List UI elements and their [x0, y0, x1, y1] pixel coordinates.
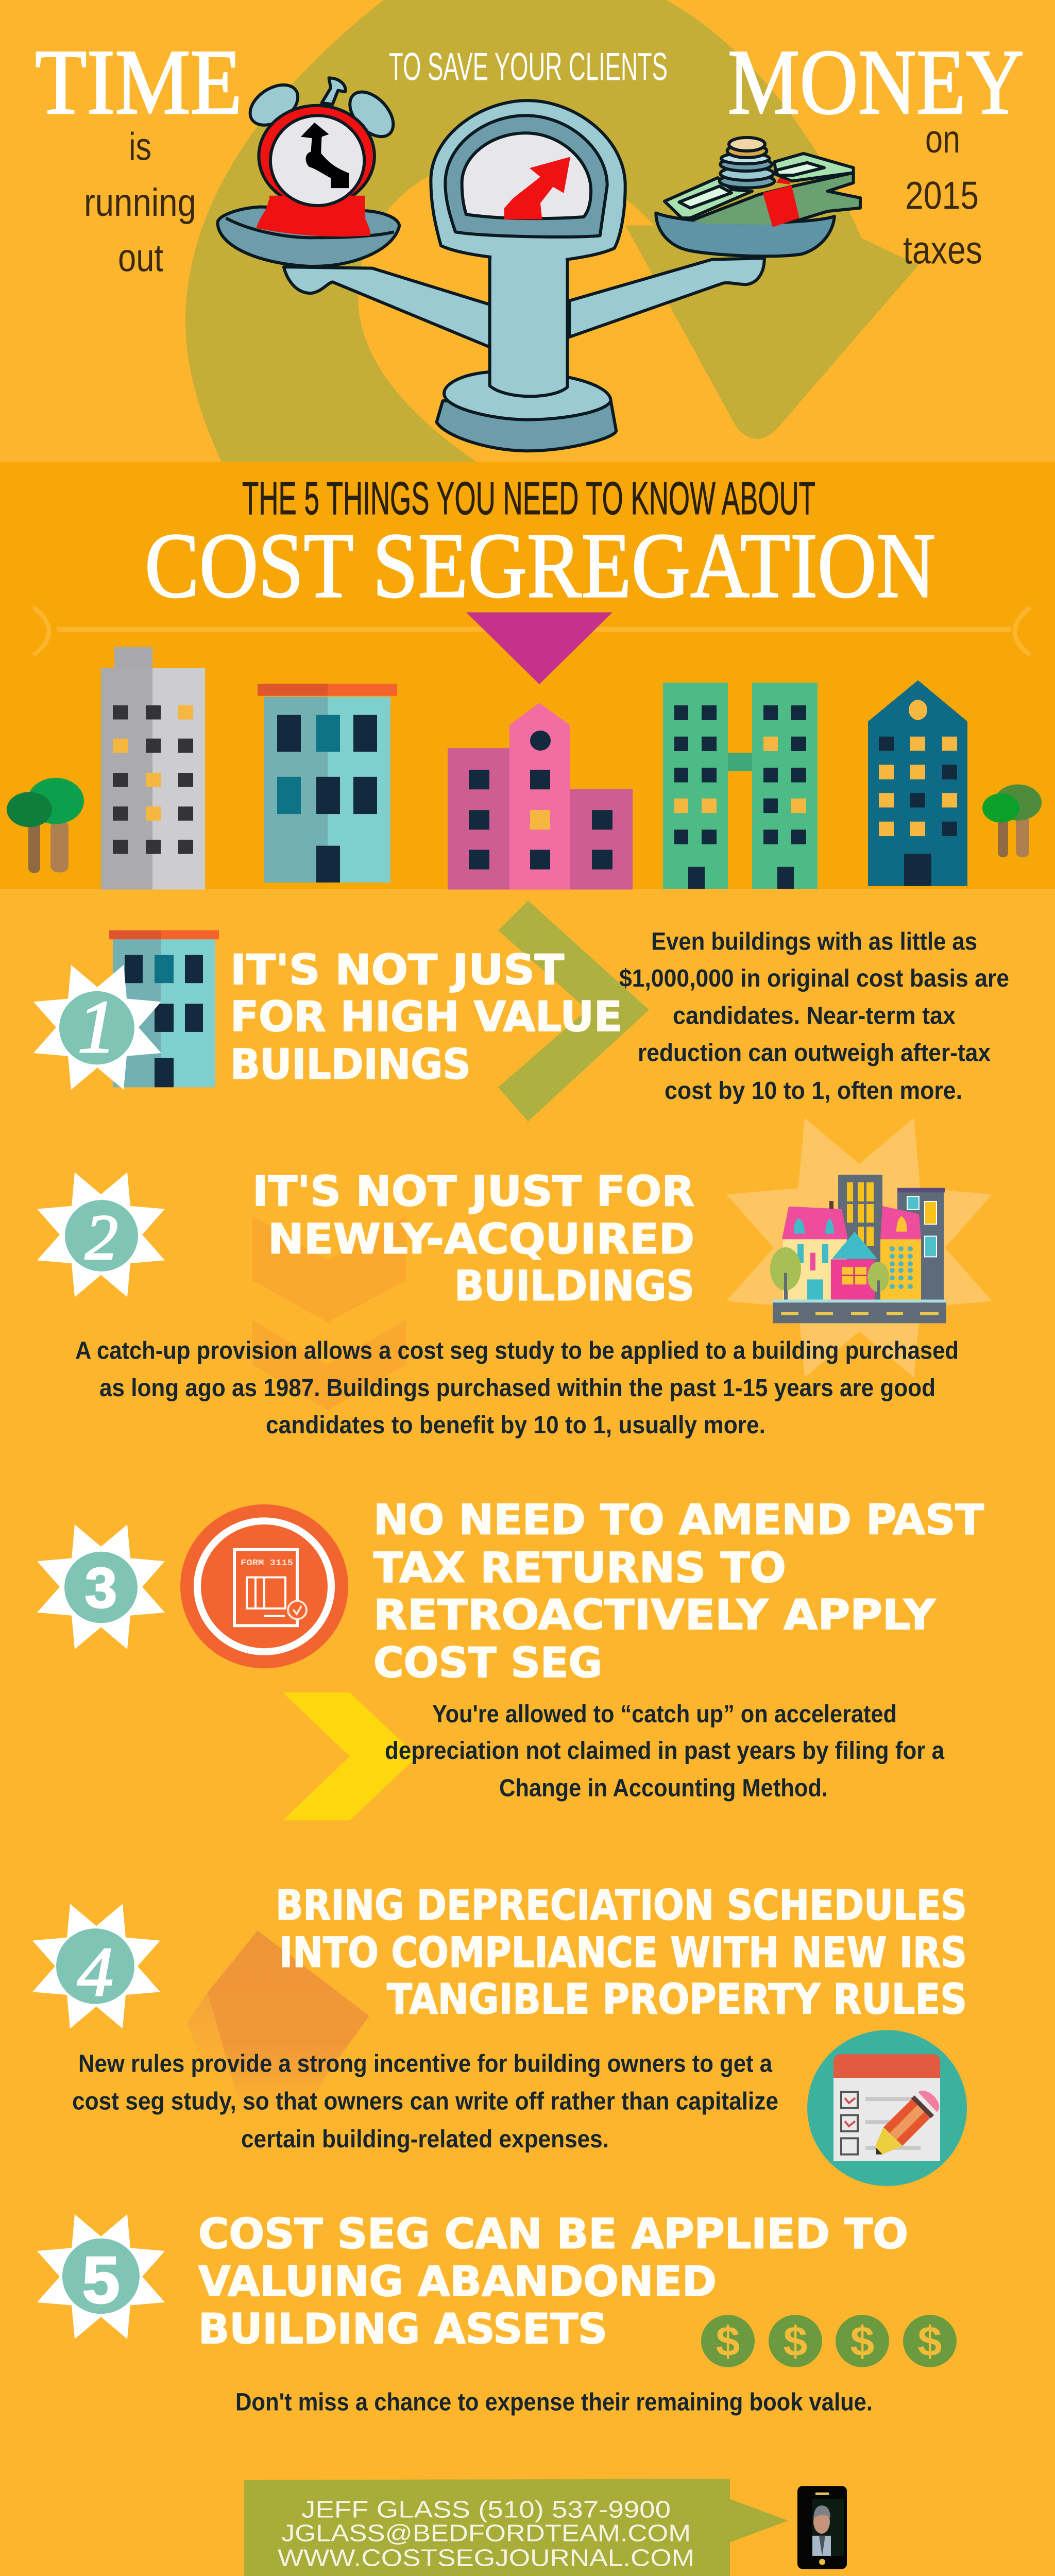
heading: item 1: IT'S NOT JUST — [230, 946, 564, 994]
heading: item 3: TAX RETURNS TO — [373, 1544, 786, 1592]
building: blue gabled — [868, 680, 967, 886]
body text: item 4: New rules provide a strong incentive for building owners to get a — [78, 2050, 773, 2077]
heading: item 3: COST SEG — [373, 1639, 602, 1687]
badge: number 1: 1 — [78, 986, 116, 1069]
body text: item 1: reduction can outweigh after-tax — [638, 1039, 991, 1066]
badge: number 5: 5 — [82, 2243, 120, 2317]
badge: number 3: 3 — [85, 1557, 117, 1620]
callout: contact speech arrow — [244, 2479, 788, 2576]
icon: four dollar coins — [701, 2315, 957, 2367]
ribbon line with brackets — [33, 607, 1030, 655]
background chevron: yellow right arrow — [283, 1692, 417, 1820]
icon: phone with portrait — [797, 2486, 847, 2569]
icon: balance scale with dial — [284, 100, 764, 451]
icon: four dollar coins: $ — [784, 2317, 807, 2365]
text: on 2015 taxes: taxes — [903, 229, 982, 273]
heading: item 5 — [198, 2210, 908, 2353]
heading: item 5: VALUING ABANDONED — [198, 2258, 717, 2306]
background chevron: olive right arrow — [498, 901, 649, 1122]
body text: item 1: cost by 10 to 1, often more. — [665, 1077, 962, 1105]
heading: cost segregation: COST SEGREGATION — [145, 514, 935, 617]
title: TIME: TIME — [35, 30, 242, 133]
text: contact details: WWW.COSTSEGJOURNAL.COM — [278, 2545, 694, 2571]
body text: item 3: depreciation not claimed in past years by filing for a — [385, 1737, 945, 1765]
body text: item 3 — [385, 1700, 945, 1802]
badge: number 4 — [32, 1904, 160, 2029]
icon: alarm clock on left pan — [217, 78, 402, 266]
badge: number 3 — [37, 1524, 165, 1649]
heading: item 2: NEWLY-ACQUIRED — [268, 1215, 694, 1263]
background chevrons: pale orange down arrows — [252, 1216, 406, 1410]
body text: item 2: candidates to benefit by 10 to 1, usually more. — [266, 1412, 765, 1439]
heading: item 1: BUILDINGS — [230, 1041, 471, 1089]
heading: item 2: BUILDINGS — [454, 1262, 694, 1310]
text: is running out: is — [129, 125, 151, 168]
heading: item 1: FOR HIGH VALUE — [230, 993, 622, 1041]
badge: number 4: 4 — [77, 1933, 113, 2011]
icon: form 3115 badge — [180, 1504, 348, 1668]
heading: item 2: IT'S NOT JUST FOR — [252, 1168, 694, 1216]
icon: form 3115 badge: FORM 3115 — [241, 1558, 293, 1568]
building: green twin towers — [663, 683, 818, 889]
body text: item 2: A catch-up provision allows a cost seg study to be applied to a building purchased — [75, 1337, 959, 1365]
text: contact details — [278, 2496, 694, 2571]
text: is running out: running — [84, 181, 196, 225]
heading: item 5: COST SEG CAN BE APPLIED TO — [198, 2210, 908, 2258]
body text: item 2: as long ago as 1987. Buildings purchased within the past 1-15 years are good — [99, 1374, 935, 1402]
background: pale star — [726, 1118, 992, 1378]
heading: item 3: RETROACTIVELY APPLY — [373, 1591, 936, 1639]
badge: number 1 — [33, 965, 161, 1090]
text: is running out — [84, 125, 196, 280]
icon: four dollar coins: $ — [918, 2317, 942, 2365]
body text: item 4: cost seg study, so that owners can write off rather than capitalize — [72, 2088, 778, 2115]
heading: item 3 — [373, 1496, 984, 1687]
background: orange diamond — [187, 1930, 369, 2113]
heading: item 2 — [252, 1168, 694, 1310]
heading: item 1 — [230, 946, 622, 1089]
panel: cost segregation band — [0, 462, 1055, 890]
tree group left — [7, 778, 84, 873]
magenta down triangle — [466, 612, 612, 684]
heading: item 5: BUILDING ASSETS — [198, 2306, 607, 2353]
body text: item 2 — [75, 1337, 959, 1439]
heading: item 3: NO NEED TO AMEND PAST — [373, 1496, 984, 1544]
text: on 2015 taxes — [903, 117, 982, 273]
building: pink church — [448, 703, 633, 890]
body text: item 1: $1,000,000 in original cost basis are — [619, 965, 1009, 992]
body text: item 1: candidates. Near-term tax — [673, 1002, 956, 1029]
body text: item 3: You're allowed to “catch up” on accelerated — [432, 1700, 897, 1728]
building: gray tower — [101, 647, 205, 890]
text: contact details: JGLASS@BEDFORDTEAM.COM — [281, 2520, 691, 2546]
body text: item 3: Change in Accounting Method. — [499, 1774, 828, 1802]
text: on 2015 taxes: on — [925, 117, 960, 161]
badge: number 2 — [37, 1172, 165, 1297]
icon: colourful city block — [770, 1175, 946, 1323]
icon: money and coins on right pan — [656, 138, 860, 256]
icon: four dollar coins: $ — [716, 2317, 740, 2365]
background: olive circular arrow — [185, 0, 918, 462]
text: is running out: out — [118, 236, 163, 280]
body text: item 5: Don't miss a chance to expense their remaining book value. — [235, 2388, 873, 2416]
body text: item 4: certain building-related expenses. — [241, 2125, 609, 2153]
badge: number 5 — [37, 2214, 165, 2339]
heading: item 4: TANGIBLE PROPERTY RULES — [387, 1976, 967, 2024]
body text: item 1: Even buildings with as little as — [651, 928, 977, 956]
body text: item 4 — [72, 2050, 778, 2153]
tree group right — [982, 784, 1042, 857]
title: to save your clients: TO SAVE YOUR CLIENTS — [389, 45, 668, 89]
building: teal with orange roof — [258, 684, 397, 883]
text: contact details: JEFF GLASS (510) 537-9900 — [301, 2496, 671, 2523]
body text: item 1 — [619, 928, 1009, 1105]
icon: checklist and pencil — [807, 2030, 967, 2186]
heading: item 4 — [276, 1882, 967, 2024]
icon: small teal building — [109, 930, 219, 1087]
badge: number 2: 2 — [85, 1202, 118, 1273]
icon: four dollar coins: $ — [850, 2317, 874, 2365]
text: on 2015 taxes: 2015 — [905, 174, 979, 217]
